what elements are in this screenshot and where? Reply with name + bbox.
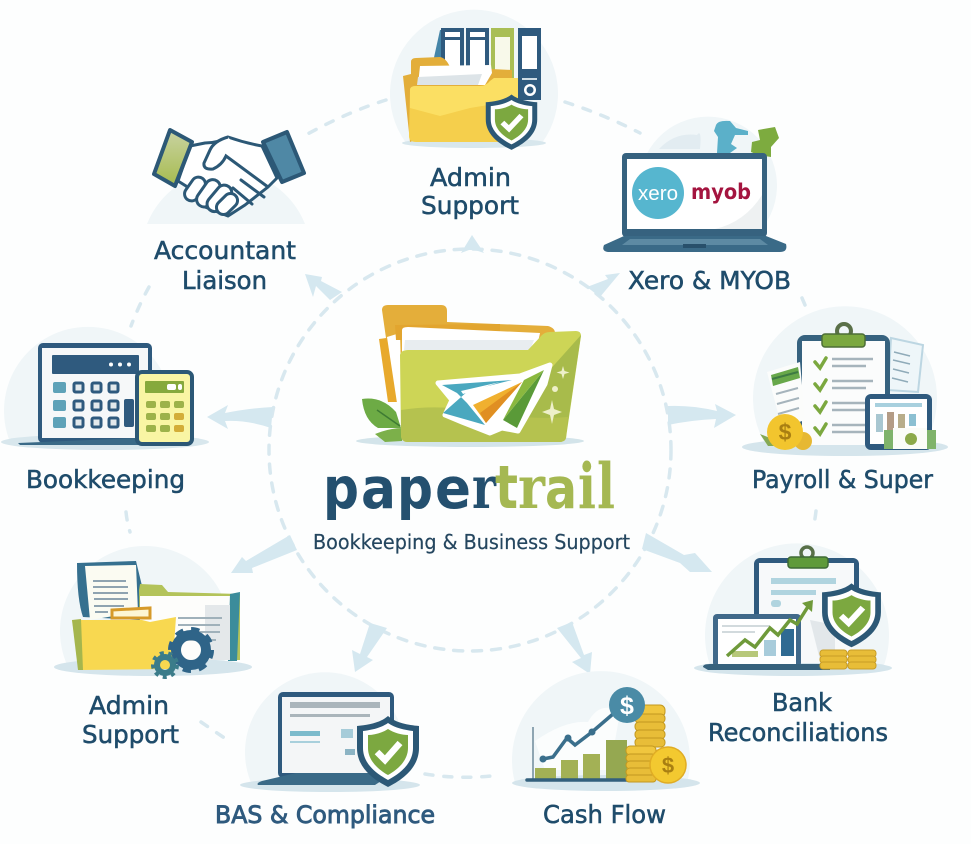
outer dashed connectors bbox=[126, 100, 816, 777]
panel: Xero & MYOB bbox=[603, 117, 791, 295]
wordmark: i bbox=[578, 449, 596, 523]
panel: Accountant Liaison bbox=[147, 130, 305, 295]
label: BAS & Compliance bbox=[215, 801, 435, 829]
panel: Admin Support (top) bbox=[390, 10, 558, 220]
inner dashed ring bbox=[269, 249, 671, 651]
panel: Bookkeeping bbox=[1, 327, 209, 494]
label: Reconciliations bbox=[708, 718, 888, 747]
icon: growth chart and coins: $ bbox=[620, 692, 634, 720]
label: Bank bbox=[772, 688, 833, 717]
label: Admin bbox=[430, 163, 511, 192]
label: Liaison bbox=[182, 266, 267, 295]
icon: clipboard, payslip, coin and tablet: $ bbox=[779, 419, 792, 445]
arrows radiating from the hub bbox=[207, 235, 736, 674]
icon: laptop with logos: myob bbox=[691, 180, 751, 204]
tagline: Bookkeeping & Business Support bbox=[313, 530, 630, 554]
wordmark: r bbox=[472, 453, 497, 522]
icon: folders, documents and gears bbox=[54, 546, 252, 677]
wordmark: e bbox=[435, 456, 471, 522]
wordmark: r bbox=[518, 453, 546, 522]
panel: Payroll & Super bbox=[742, 306, 948, 494]
label: Bookkeeping bbox=[26, 465, 185, 494]
wordmark: p bbox=[323, 456, 359, 522]
wordmark: p bbox=[397, 456, 433, 522]
wordmark: t bbox=[495, 453, 518, 523]
icon: growth chart and coins bbox=[512, 671, 700, 791]
icon: binders, folder and shield bbox=[390, 10, 558, 150]
panel: Bank Reconciliations bbox=[694, 543, 892, 747]
icon: laptop with logos bbox=[603, 117, 786, 252]
label: Payroll & Super bbox=[752, 465, 934, 494]
label: Admin bbox=[89, 691, 169, 720]
centre logo bbox=[313, 305, 630, 554]
label: Support bbox=[82, 720, 179, 749]
panel: Cash Flow bbox=[512, 671, 700, 829]
icon: handshake bbox=[147, 130, 305, 224]
label: Cash Flow bbox=[543, 800, 666, 829]
wordmark bbox=[323, 449, 615, 523]
label: Xero & MYOB bbox=[628, 266, 791, 295]
icon: clipboard, payslip, coin and tablet bbox=[742, 306, 948, 456]
label: Accountant bbox=[154, 236, 296, 265]
icon: calculator screen and calculator bbox=[1, 327, 209, 450]
panel: BAS & Compliance bbox=[215, 672, 435, 829]
icon: clipboard, laptop chart, shield and coins bbox=[694, 543, 892, 676]
label: Support bbox=[421, 191, 519, 220]
icon: folder with paper plane bbox=[356, 305, 584, 447]
wordmark: l bbox=[597, 449, 615, 523]
icon: growth chart and coins: $ bbox=[662, 753, 674, 778]
icon: laptop with shield bbox=[240, 672, 420, 792]
wordmark: a bbox=[361, 456, 396, 522]
wordmark: a bbox=[545, 456, 577, 522]
panel: Admin Support (left) bbox=[54, 546, 252, 749]
icon: laptop with logos: xero bbox=[638, 183, 678, 205]
